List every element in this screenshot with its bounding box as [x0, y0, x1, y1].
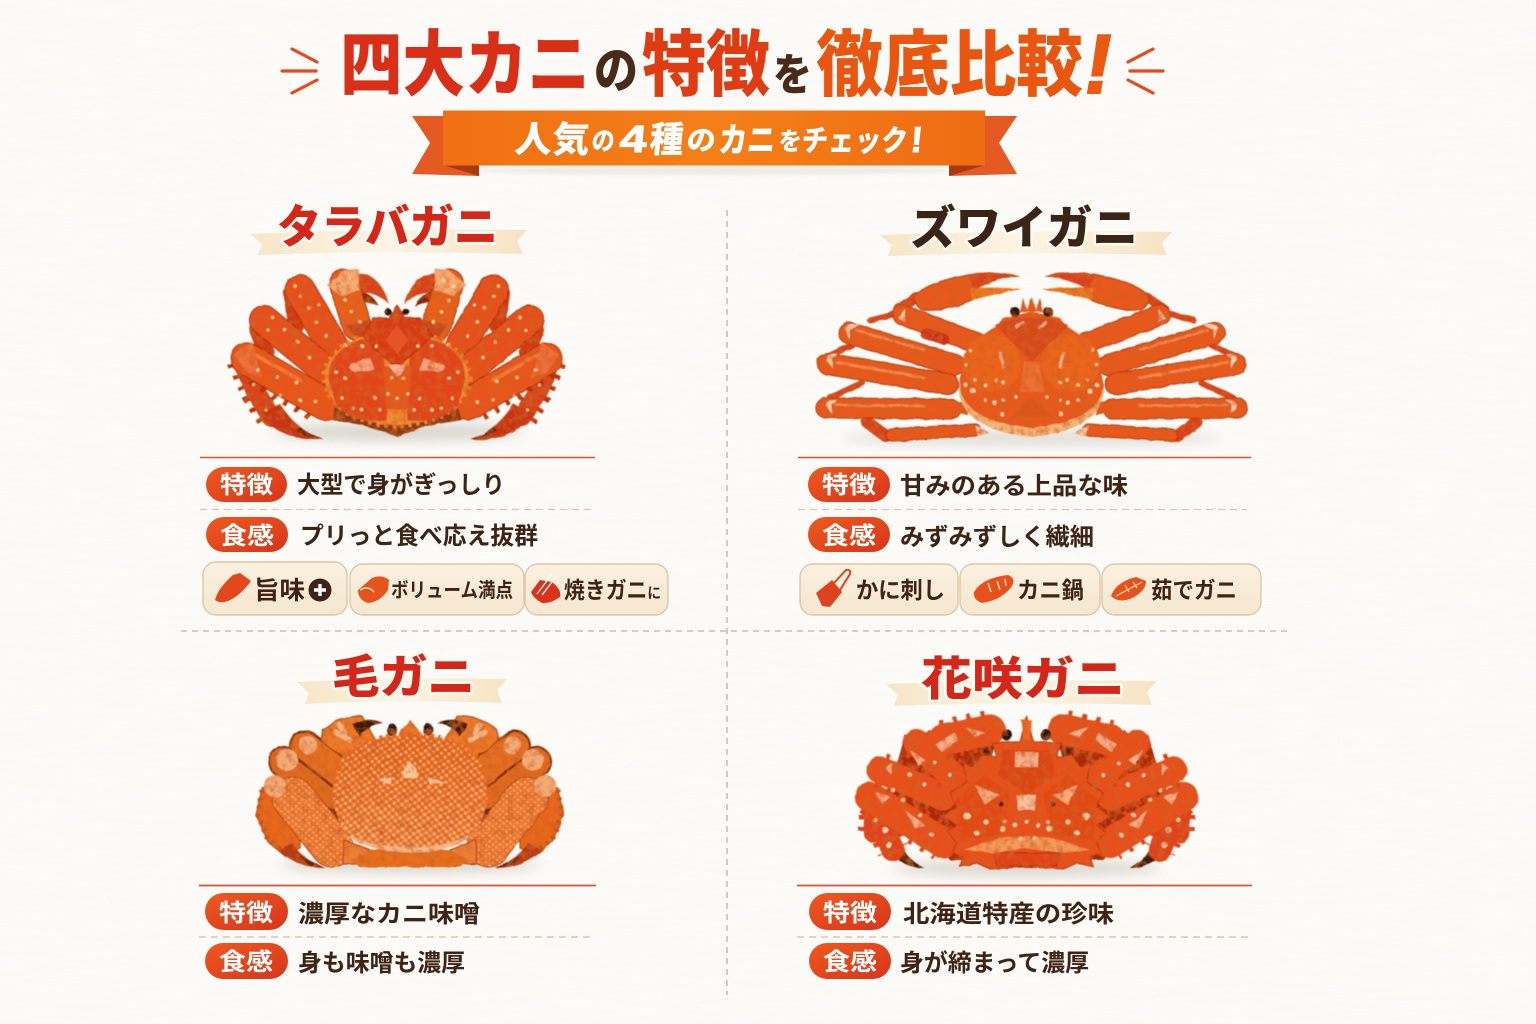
carapace spots — [334, 343, 460, 412]
row: 特徴: 濃厚なカニ味噌 — [298, 901, 480, 928]
subtitle ribbon: チェック — [800, 125, 909, 158]
chip: 茹でガニ — [1102, 564, 1261, 615]
left legs and claw — [256, 716, 385, 868]
heading: タラバガニ: タラバガニ — [277, 201, 498, 253]
heading: 花咲ガニ: 花咲ガニ — [921, 653, 1125, 705]
shell markings — [380, 762, 445, 785]
crab: 花咲ガニ — [870, 717, 1183, 876]
row: 食感: 身も味噌も濃厚 — [298, 950, 465, 977]
row: 食感: 食感 — [219, 949, 273, 976]
chip: かに刺し: かに刺し — [856, 577, 945, 603]
crab: タラバガニ — [234, 269, 559, 441]
right legs and claw — [1053, 725, 1183, 868]
eyes — [1002, 729, 1012, 741]
title: 四大カニ — [340, 26, 590, 106]
row: 特徴: 大型で身がぎっしり — [297, 471, 505, 499]
shell spots — [964, 812, 1090, 840]
chip: かに刺し — [800, 564, 958, 615]
row: 特徴 — [809, 893, 1114, 930]
arm plate — [920, 327, 950, 346]
title: 特徴 — [642, 26, 770, 106]
carapace lobes — [329, 338, 387, 421]
row: 特徴: 特徴 — [822, 472, 876, 499]
subtitle ribbon: 4 — [618, 119, 649, 161]
icon: right emphasis marks — [1128, 49, 1163, 93]
right legs — [404, 269, 559, 439]
right legs and claw — [1042, 272, 1237, 437]
subtitle ribbon: カニ — [717, 122, 777, 160]
subtitle ribbon — [412, 110, 1017, 176]
icon: left emphasis marks — [282, 49, 317, 93]
row: 特徴: 特徴 — [220, 472, 273, 499]
subtitle ribbon: を — [777, 128, 803, 156]
left legs and claw — [870, 725, 1000, 868]
shell lobes — [995, 318, 1068, 362]
row: 食感 — [206, 517, 538, 552]
title: の — [594, 43, 638, 99]
panel: 毛ガニ — [199, 651, 596, 979]
row: 食感: 食感 — [823, 949, 877, 976]
panel: 花咲ガニ — [797, 653, 1252, 979]
subtitle ribbon: 種 — [648, 119, 686, 160]
chip: 茹でガニ: 茹でガニ — [1151, 577, 1237, 603]
row: 食感: 身が締まって濃厚 — [900, 949, 1089, 977]
chip: 焼きガニに — [525, 564, 668, 615]
chip: 旨味+: 旨味 — [254, 577, 305, 605]
row: 食感 — [205, 943, 465, 979]
separator line — [200, 456, 595, 458]
row: 食感: みずみずしく繊細 — [900, 524, 1094, 551]
subtitle ribbon: の — [590, 126, 616, 156]
subtitle ribbon: ! — [909, 119, 925, 160]
carapace — [959, 312, 1104, 437]
divider: horizontal dashed — [181, 630, 1290, 632]
panel: タラバガニ — [200, 201, 668, 615]
row: 食感: プリっと食べ応え抜群 — [300, 523, 538, 550]
subtitle ribbon: の — [685, 125, 717, 156]
lower plate — [350, 850, 470, 867]
carapace rim — [325, 331, 469, 425]
chip: カニ鍋 — [960, 564, 1100, 615]
row: 特徴: 特徴 — [219, 900, 273, 927]
underside — [332, 408, 462, 437]
separator line — [199, 884, 596, 886]
title: を — [773, 51, 812, 100]
heading: 毛ガニ — [297, 651, 507, 704]
row: 特徴: 北海道特産の珍味 — [903, 901, 1114, 928]
divider: vertical dashed — [726, 210, 728, 995]
separator line — [798, 456, 1251, 458]
subtitle ribbon: 人気 — [513, 119, 592, 160]
chip: カニ鍋: カニ鍋 — [1017, 577, 1084, 603]
carapace — [333, 735, 487, 853]
row: 食感: 食感 — [220, 523, 274, 550]
heading: 毛ガニ: 毛ガニ — [332, 651, 475, 703]
row: 特徴 — [808, 467, 1128, 502]
chip: 焼きガニに: 焼きガニに — [564, 577, 661, 603]
chip: ボリューム満点: ボリューム満点 — [391, 579, 513, 602]
crab: ズワイガニ — [826, 272, 1237, 445]
title: 徹底比較 — [816, 26, 1083, 106]
row: 特徴 — [205, 893, 480, 930]
shell spots — [964, 348, 1099, 416]
eyes and rostrum — [1020, 297, 1043, 312]
heading: 花咲ガニ — [886, 653, 1157, 706]
row: 特徴: 甘みのある上品な味 — [900, 473, 1128, 500]
left legs and claw — [826, 272, 1021, 437]
row: 食感 — [808, 517, 1094, 552]
carapace — [943, 717, 1110, 869]
shell lobes — [998, 750, 1055, 795]
rostrum and eyes — [395, 720, 425, 738]
separator line — [797, 884, 1252, 886]
title — [340, 17, 1121, 111]
row: 食感 — [809, 943, 1089, 979]
left legs — [234, 269, 389, 439]
row: 特徴: 特徴 — [823, 900, 877, 927]
chip: 旨味+ — [203, 562, 347, 615]
heading: ズワイガニ: ズワイガニ — [910, 202, 1138, 254]
chip: ボリューム満点 — [350, 564, 524, 615]
row: 食感: 食感 — [822, 523, 876, 550]
right legs and claw — [435, 716, 564, 868]
row: 特徴 — [206, 467, 505, 502]
head — [362, 305, 432, 364]
crab: 毛ガニ — [256, 716, 564, 873]
title: ! — [1077, 17, 1121, 111]
panel: ズワイガニ — [798, 202, 1261, 615]
